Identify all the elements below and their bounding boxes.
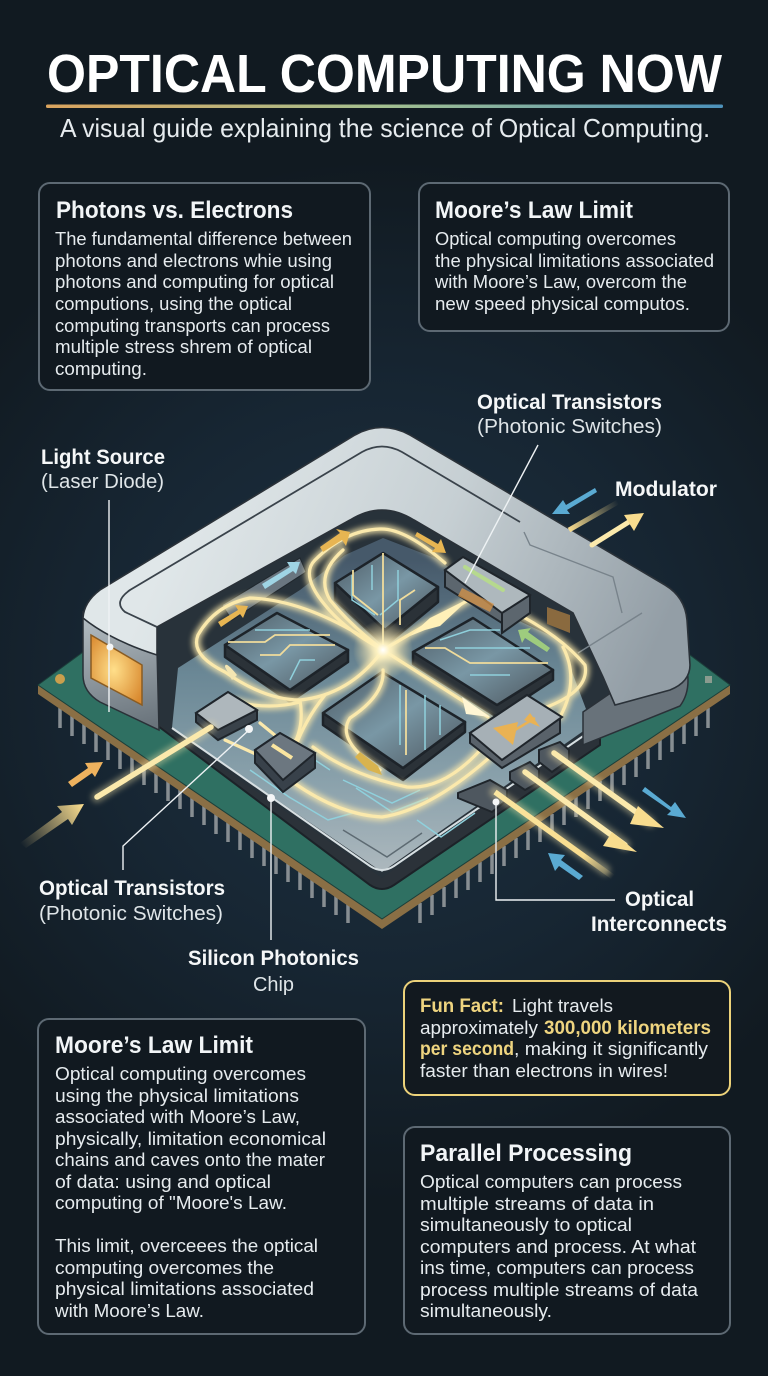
chip diagram (20, 428, 730, 940)
recess dark backdrop (157, 510, 615, 878)
panel body text: simultaneously. (420, 1301, 552, 1321)
processor die: left (225, 613, 348, 702)
label: optical transistors top: (Photonic Switches) (477, 416, 662, 438)
leader: optical interconnects (492, 798, 615, 900)
panel heading: Photons vs. Electrons (56, 197, 293, 224)
processor die: right (413, 618, 553, 717)
panel body text: computing transports can process (55, 316, 330, 336)
panel body text: ins time, computers can process (420, 1258, 694, 1278)
incoming beam lower left (20, 727, 211, 848)
panel: moore's law limit top (419, 183, 729, 331)
chip pins (60, 708, 708, 923)
panel: parallel processing (404, 1127, 730, 1334)
label: silicon photonics chip (188, 947, 359, 996)
panel body text: Optical computing overcomes (55, 1064, 306, 1084)
panel body text: computing of "Moore's Law. (55, 1193, 287, 1213)
panel: moore's law limit bottom (38, 1019, 365, 1334)
panel body text: associated with Moore’s Law, (55, 1107, 300, 1127)
panel body text: The fundamental difference between (55, 229, 352, 249)
panel body text: multiple stress shrem of optical (55, 337, 312, 357)
leader: light source (106, 500, 114, 712)
housing right block (583, 665, 688, 745)
panel body text: computing. (55, 359, 147, 379)
panel body text: computions, using the optical (55, 294, 292, 314)
panel: photons vs electrons (39, 183, 370, 390)
outgoing beams lower right (495, 753, 686, 880)
panel body text: chains and caves onto the mater (55, 1150, 325, 1170)
laser diode light source (91, 635, 142, 705)
panel body text (55, 229, 352, 379)
panel heading: Moore’s Law Limit (435, 197, 633, 224)
optical transistor block left (196, 692, 257, 740)
spindle on beam (410, 598, 470, 636)
panel body text: physical limitations associated (55, 1279, 314, 1299)
callout: fun fact: approximately (420, 1018, 538, 1038)
label: optical interconnects (591, 888, 727, 936)
panel body text: photons and electrons whie using (55, 251, 332, 271)
panel body text: computers and process. At what (420, 1237, 696, 1257)
panel body text: process multiple streams of data (420, 1280, 699, 1300)
label: optical transistors top (477, 391, 662, 438)
panel body text (434, 229, 714, 314)
panel body text: of data: using and optical (55, 1172, 271, 1192)
label: light source: Light Source (41, 446, 165, 469)
panel body text: multiple streams of data in (420, 1194, 654, 1214)
label: optical transistors top: Optical Transistors (477, 391, 662, 414)
processor die: bottom (323, 672, 465, 780)
beams upper right modulator (552, 488, 644, 545)
light paths glow (197, 529, 586, 817)
etched circuit traces (250, 750, 475, 837)
callout: fun fact: faster than electrons in wires! (420, 1061, 668, 1081)
label: modulator: Modulator (615, 478, 717, 501)
panel body text: computing overcomes the (55, 1258, 274, 1278)
housing left wall (83, 612, 159, 730)
processor die: top (335, 553, 438, 646)
label: silicon photonics chip: Silicon Photonics (188, 947, 359, 970)
panel body text: photons and computing for optical (55, 272, 334, 292)
panel body text: new speed physical computos. (435, 294, 690, 314)
recess lit floor (172, 538, 592, 872)
panel body text: with Moore’s Law, overcom the (434, 272, 687, 292)
modulator block right (470, 695, 562, 768)
label: silicon photonics chip: Chip (253, 974, 294, 996)
callout: fun fact (404, 981, 730, 1095)
panel body text: using the physical limitations (55, 1086, 299, 1106)
chip substrate (150, 640, 600, 889)
arrowhead on diagonal path (462, 697, 490, 717)
panel body text: simultaneously to optical (420, 1215, 632, 1235)
callout: fun fact: Fun Fact: (420, 996, 504, 1017)
callout: fun fact: 300,000 kilometers (544, 1018, 711, 1039)
optical transistor block top right (445, 557, 570, 633)
label: optical interconnects: Optical (625, 888, 694, 911)
leader: optical transistors bottom (123, 725, 253, 870)
label: light source (41, 446, 165, 493)
panel body text (420, 1172, 699, 1321)
panel body text: the physical limitations associated (435, 251, 714, 271)
light paths (197, 529, 586, 817)
small flow arrows inside chip (218, 529, 550, 775)
circuit board (38, 625, 730, 929)
panel body text: physically, limitation economical (55, 1129, 326, 1149)
panel heading: Parallel Processing (420, 1140, 632, 1167)
panel body text (54, 1064, 326, 1321)
label: optical transistors bottom (39, 877, 225, 925)
panel body text: This limit, overceees the optical (55, 1236, 318, 1256)
callout: fun fact: per second (420, 1039, 514, 1060)
optical transistor block centre (255, 733, 315, 792)
label: optical interconnects: Interconnects (591, 913, 727, 936)
subtitle: A visual guide explaining the science of Optical Computing. (60, 113, 710, 143)
leader: silicon photonics (267, 794, 275, 940)
panel body text: Optical computers can process (420, 1172, 682, 1192)
callout: fun fact: , making it significantly (514, 1039, 708, 1059)
label: optical transistors bottom: Optical Transistors (39, 877, 225, 900)
panel body text: with Moore’s Law. (54, 1301, 204, 1321)
label: light source: (Laser Diode) (41, 471, 164, 493)
label: optical transistors bottom: (Photonic Switches) (39, 903, 223, 925)
title: OPTICAL COMPUTING NOW (47, 44, 722, 104)
gray channel block (222, 558, 306, 620)
housing shell (83, 428, 690, 705)
chip plate highlight edge (172, 728, 592, 870)
leader: optical transistors top (465, 445, 538, 583)
panel body text: Optical computing overcomes (435, 229, 676, 249)
title rule (46, 104, 723, 108)
interconnect ports (458, 742, 569, 812)
panel heading: Moore’s Law Limit (55, 1032, 253, 1059)
callout: fun fact: Light travels (512, 996, 613, 1016)
central flare (353, 620, 413, 680)
